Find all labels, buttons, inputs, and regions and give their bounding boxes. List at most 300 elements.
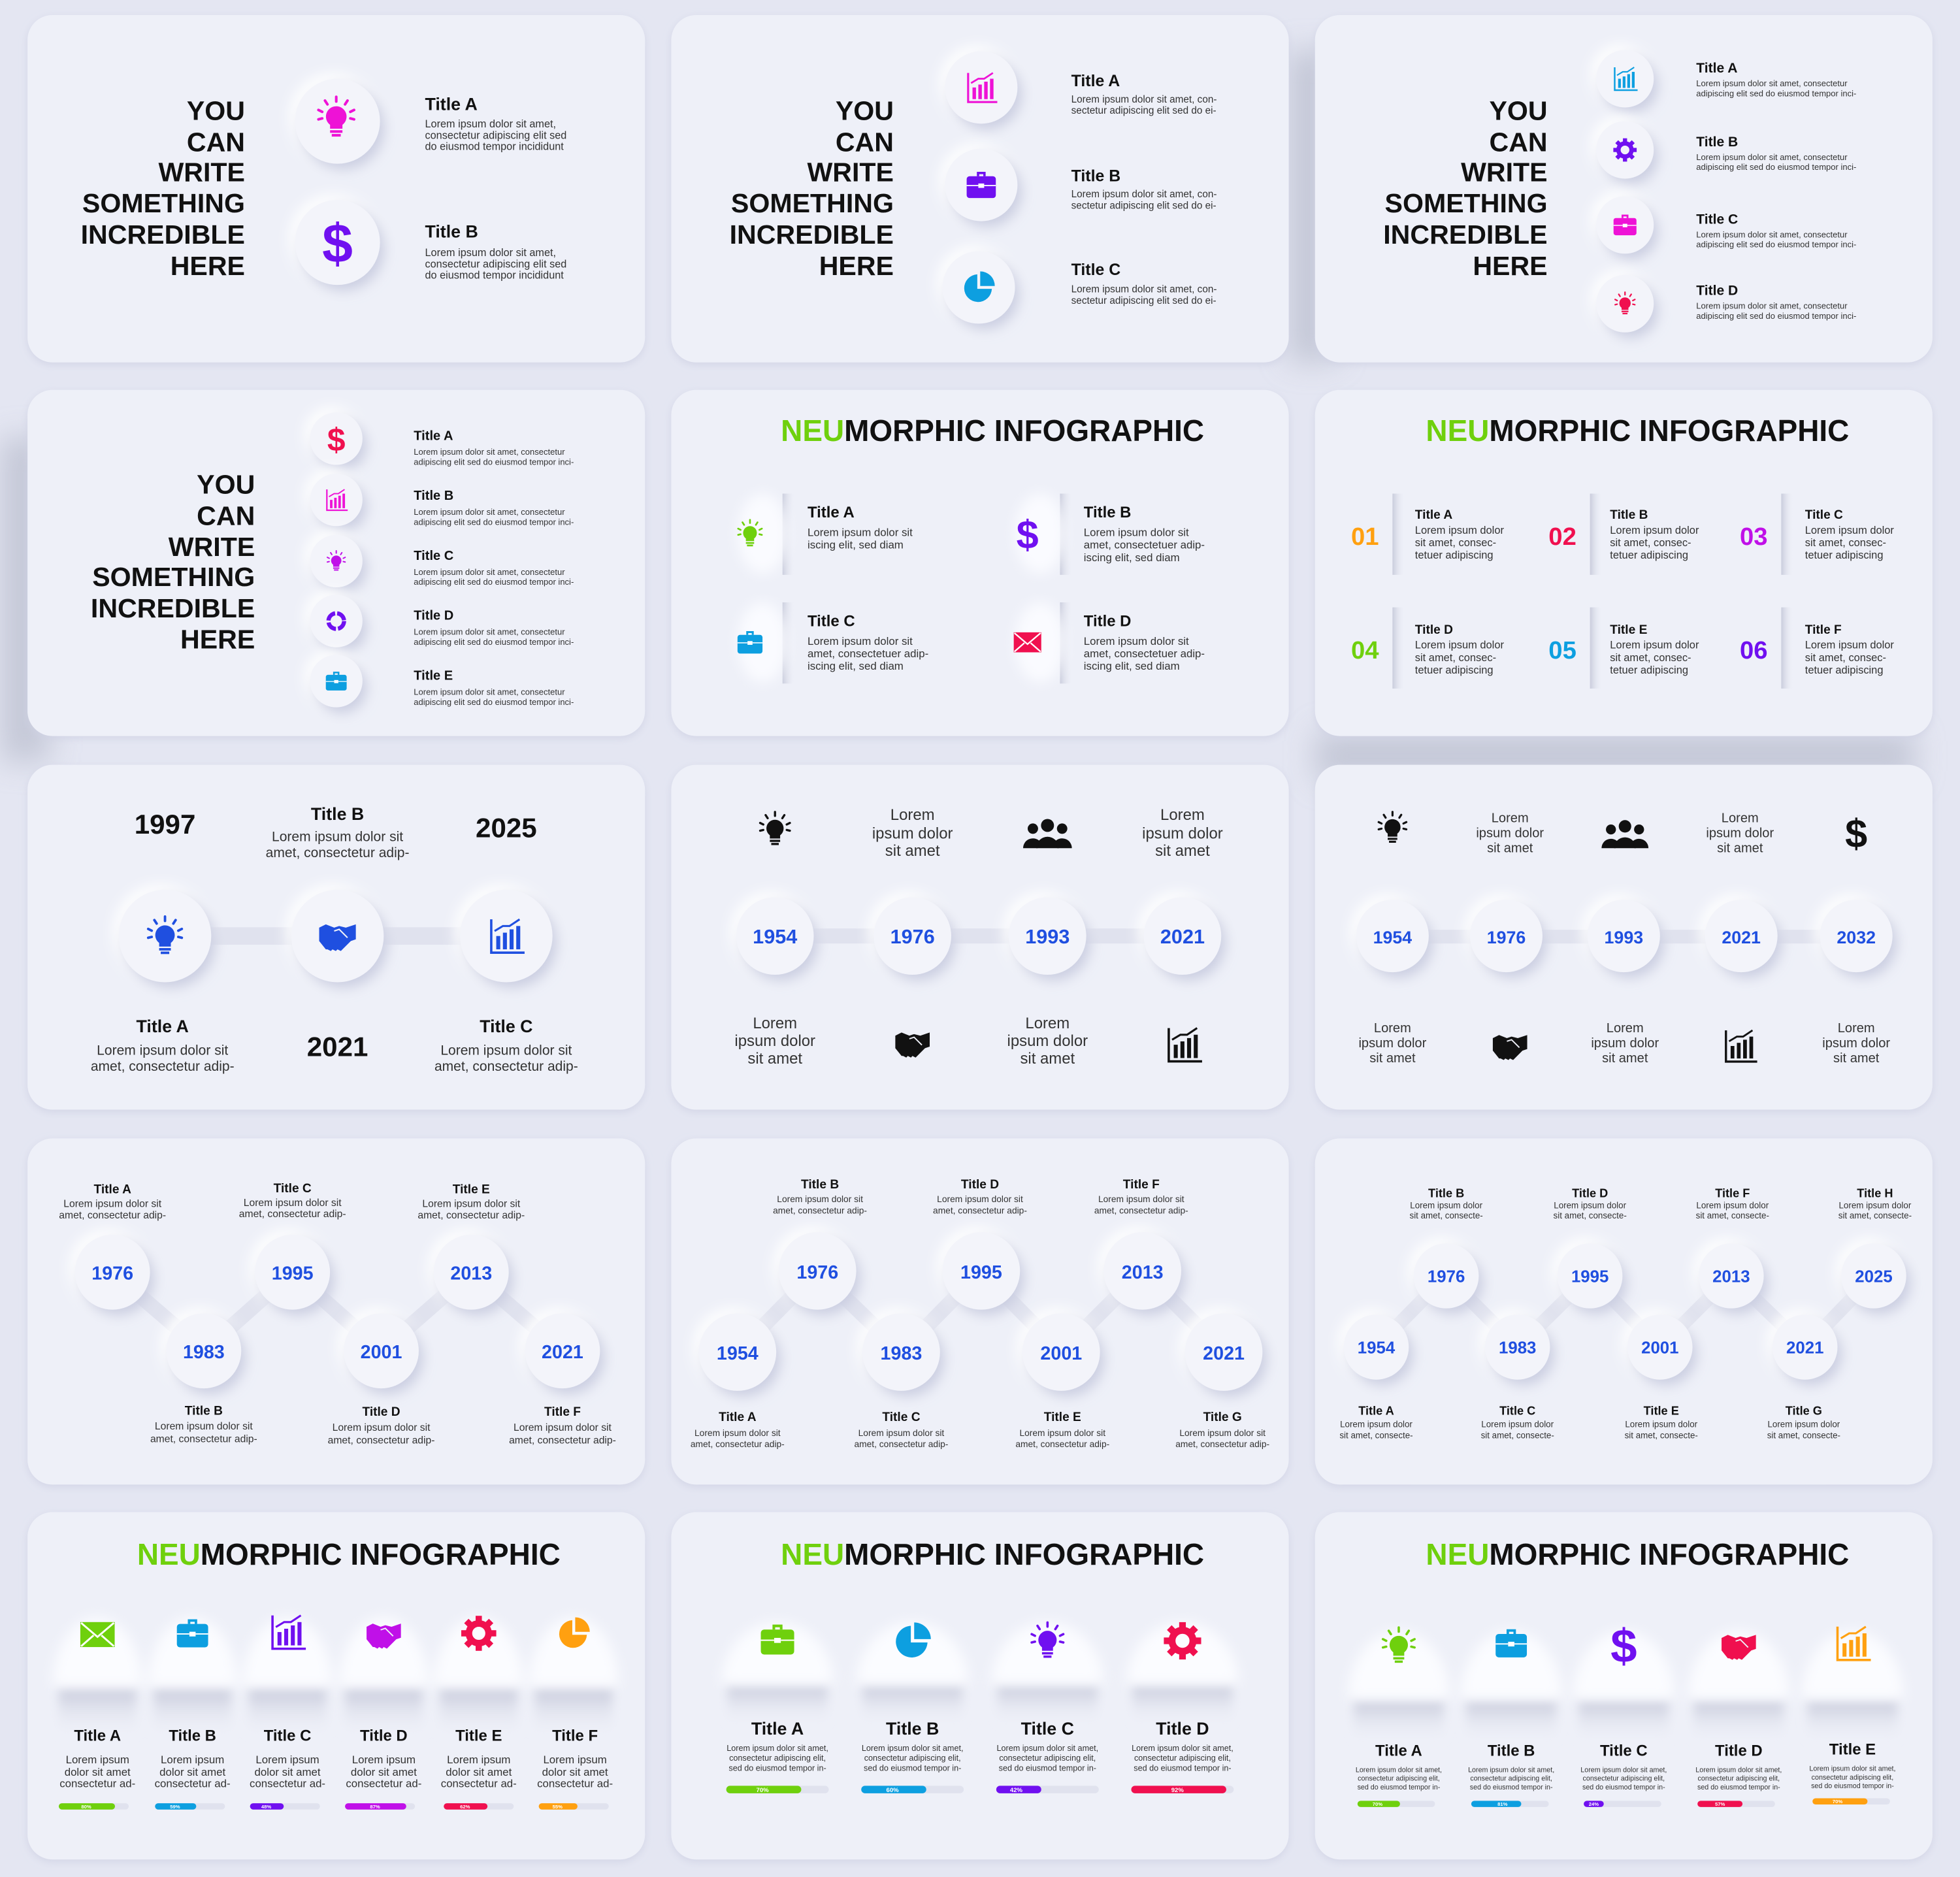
labels: amet, consectetur adip- [328,1435,434,1446]
text: items: Title A [1071,72,1120,90]
progress bars [1358,1798,1890,1807]
text: items: Title A [414,429,453,443]
text: items: adipiscing elit sed do eiusmod tempor inci- [1696,311,1856,321]
labels: Lorem ipsum dolor sit amet, [727,1744,828,1753]
text: title A: Title A [425,94,478,114]
panel: timeline 4 [671,765,1289,1110]
labels: amet, consectetur adip- [266,845,409,860]
icon: bulb [295,79,380,164]
nodes: 1995 [272,1264,314,1284]
nodes: 1983 [1499,1339,1536,1358]
labels: sed do eiusmod tempor in- [999,1763,1096,1772]
icon: briefcase [945,149,1017,221]
heading: SOMETHING [1385,188,1548,218]
text: items: Lorem ipsum dolor sit amet, con- [1071,284,1217,295]
labels: Title D [1572,1186,1608,1200]
nodes: 1995 [960,1262,1002,1283]
panel: two items [27,15,645,363]
nodes: 2021 [1786,1339,1823,1358]
title: NEUMORPHIC INFOGRAPHIC [1426,414,1849,448]
labels: Title B [886,1719,939,1738]
labels: sed do eiusmod tempor in- [1134,1763,1232,1772]
labels: Title A [1375,1742,1422,1759]
title: NEUMORPHIC INFOGRAPHIC [781,1537,1204,1571]
item B: amet, consectetuer adip- [1084,539,1205,551]
labels: consectetur adipiscing elit, [1698,1775,1780,1783]
nodes [75,1235,600,1388]
panel: zigzag 7 [671,1139,1289,1484]
progress bars: 42% [1010,1787,1023,1794]
labels: Lorem ipsum dolor sit [244,1198,342,1209]
labels: Title E [455,1727,502,1745]
heading: INCREDIBLE [91,593,255,623]
labels: Lorem ipsum dolor sit [97,1043,228,1058]
labels: sit amet [1155,842,1210,860]
text: items: tetuer adipiscing [1415,549,1494,561]
text: items: Lorem ipsum dolor sit amet, consectetur [414,567,565,577]
text: items: Title D [414,609,453,623]
text: items: Lorem ipsum dolor sit amet, consectetur [1696,301,1848,310]
text: title A: do eiusmod tempor incididunt [425,141,564,153]
progress bars: 81% [1497,1801,1508,1807]
nodes: 1976 [91,1264,133,1284]
text: items: Title B [1610,508,1648,522]
labels: Lorem ipsum dolor [1767,1419,1840,1429]
text: title B: Lorem ipsum dolor sit amet, [425,247,556,259]
labels: amet, consectetur adip- [691,1439,785,1449]
heading: YOU [187,96,245,126]
text: title B: do eiusmod tempor incididunt [425,270,564,282]
years: 2021 [307,1031,368,1062]
labels: sit amet, consecte- [1767,1431,1840,1441]
panel: six numbered [1315,390,1933,736]
labels: Lorem ipsum dolor [1625,1419,1698,1429]
labels: sit amet, consecte- [1554,1211,1627,1220]
nodes: 2025 [1855,1268,1893,1286]
labels: Title C [1499,1404,1535,1417]
labels: Title A [137,1017,189,1036]
nodes: 1954 [1373,928,1412,947]
text: items: sit amet, consec- [1610,537,1691,549]
title: NEUMORPHIC INFOGRAPHIC [781,414,1204,448]
text: items: tetuer adipiscing [1805,549,1883,561]
text: items: Title B [414,489,453,503]
panel: four progress [671,1512,1289,1859]
labels: ipsum dolor [1007,1032,1088,1050]
labels: amet, consectetur adip- [1015,1439,1109,1449]
labels: Title A [74,1727,121,1745]
nodes [699,1232,1262,1391]
labels: consectetur ad- [346,1777,421,1789]
labels: sed do eiusmod tempor in- [1358,1784,1441,1791]
nodes: 1976 [1487,928,1526,947]
labels: Lorem [1025,1015,1070,1032]
labels: Title F [1123,1178,1160,1192]
progress bars: 80% [81,1804,91,1810]
labels: sed do eiusmod tempor in- [1697,1784,1780,1791]
labels: Title C [1021,1719,1074,1738]
icon: dollar: $ [322,213,353,274]
labels: sed do eiusmod tempor in- [864,1763,961,1772]
labels: ipsum dolor [872,824,953,842]
labels: Lorem ipsum dolor sit [1179,1428,1266,1438]
progress bars: 55% [553,1804,563,1810]
labels: Lorem ipsum dolor sit [1098,1194,1184,1204]
labels: Lorem ipsum dolor sit [514,1422,612,1433]
progress bars: 48% [261,1804,271,1810]
nodes: 2021 [1160,926,1205,948]
labels: Lorem ipsum dolor sit amet, [1468,1766,1554,1774]
labels: dolor sit amet [542,1766,608,1778]
labels: Lorem ipsum dolor sit [937,1194,1023,1204]
text: items: Lorem ipsum dolor sit amet, consectetur [414,507,565,517]
text: title B: consectetur adipiscing elit sed [425,258,566,270]
text: items: Title C [1805,508,1843,522]
labels: Title F [1715,1186,1750,1200]
nodes: 2013 [450,1264,492,1284]
nodes: 1976 [890,926,935,948]
heading: CAN [187,127,245,157]
labels: Lorem ipsum dolor [1340,1419,1413,1429]
text: title A [425,94,566,153]
item A: Title A [808,504,855,521]
labels: consectetur adipiscing elit, [1470,1775,1552,1783]
labels: Title B [185,1404,223,1418]
labels: Lorem [1838,1021,1875,1036]
heading [1383,96,1548,281]
panel: five progress [1315,1512,1933,1859]
heading: INCREDIBLE [730,220,894,250]
nodes: 1954 [717,1343,759,1364]
labels: Title H [1857,1186,1893,1200]
text: items: adipiscing elit sed do eiusmod tempor inci- [1696,88,1856,98]
title: NEUMORPHIC INFOGRAPHIC [1426,1537,1849,1571]
labels: Title A [1358,1404,1394,1417]
domes [721,1622,1239,1725]
labels: Title E [1829,1741,1876,1759]
labels: Title C [264,1727,311,1745]
labels: Lorem [753,1015,797,1032]
labels: Lorem ipsum dolor sit amet, [1695,1766,1782,1774]
text: items: sit amet, consec- [1415,537,1496,549]
labels: Lorem ipsum dolor sit amet, [1809,1765,1896,1772]
text: items: Lorem ipsum dolor [1415,640,1504,651]
labels: consectetur adipiscing elit, [1358,1775,1440,1783]
heading [91,470,255,655]
panel: zigzag 8 [1315,1139,1933,1484]
text: items: Lorem ipsum dolor [1805,525,1894,536]
heading: YOU [1489,96,1548,126]
labels: Title D [360,1727,408,1745]
panel: four items [1315,15,1933,363]
labels: Lorem ipsum dolor sit [155,1421,253,1432]
text: items: Title C [414,549,453,563]
heading: SOMETHING [92,562,255,592]
icon: pie [943,251,1015,323]
heading: SOMETHING [82,188,245,218]
years: 2025 [476,813,537,843]
labels: Lorem [1374,1021,1411,1036]
nodes: 1993 [1025,926,1070,948]
heading: HERE [819,251,894,281]
text: items: Lorem ipsum dolor [1415,525,1504,536]
text: items: tetuer adipiscing [1610,549,1688,561]
heading: CAN [836,127,894,157]
item D: Title D [1084,612,1131,630]
text: items: sectetur adipiscing elit sed do ei- [1071,200,1217,211]
text: items: Title D [1696,283,1738,298]
icons [1596,50,1654,333]
text: items: sit amet, consec- [1415,652,1496,664]
labels: Lorem ipsum dolor sit [777,1194,863,1204]
icon: dollar [295,200,380,285]
labels: Title A [719,1411,757,1424]
labels: Title F [544,1405,581,1419]
labels: dolor sit amet [65,1766,131,1778]
labels: sed do eiusmod tempor in- [1811,1782,1894,1790]
labels: Lorem [1607,1021,1644,1036]
labels: amet, consectetur adip- [1094,1205,1188,1215]
labels: sit amet [1717,841,1763,856]
labels: Lorem ipsum dolor sit amet, [1356,1766,1442,1774]
text: items: Title D [1415,623,1453,637]
labels [59,1727,613,1789]
nodes: 2001 [1641,1339,1679,1358]
text: items: Lorem ipsum dolor [1610,525,1699,536]
item C: iscing elit, sed diam [808,660,904,672]
heading: HERE [171,251,245,281]
numbers [1351,494,1794,689]
labels: Lorem ipsum dolor sit [694,1428,781,1438]
item B: iscing elit, sed diam [1084,551,1180,564]
labels: Title E [1044,1411,1081,1424]
numbers: 03 [1740,523,1768,551]
labels: sed do eiusmod tempor in- [1470,1784,1553,1791]
labels: Title B [169,1727,216,1745]
years [135,809,537,1062]
labels: ipsum dolor [734,1032,815,1050]
labels: dolor sit amet [255,1766,321,1778]
text: items: sectetur adipiscing elit sed do ei- [1071,295,1217,306]
labels: consectetur adipiscing elit, [864,1754,961,1763]
labels: Title D [1715,1742,1763,1759]
text: items: tetuer adipiscing [1610,664,1688,676]
heading: CAN [197,500,255,530]
labels: Lorem ipsum [161,1754,224,1766]
labels: consectetur adipiscing elit, [999,1754,1096,1763]
text: title A: Lorem ipsum dolor sit amet, [425,118,556,130]
item C: Lorem ipsum dolor sit [808,635,913,647]
text: items: tetuer adipiscing [1805,664,1883,676]
heading: HERE [180,625,255,655]
text: items: Lorem ipsum dolor sit amet, consectetur [414,447,565,457]
heading: YOU [836,96,894,126]
item D [1014,602,1205,683]
icons [80,1616,590,1651]
text: items: adipiscing elit sed do eiusmod tempor inci- [414,457,574,467]
labels: Lorem ipsum dolor [1481,1419,1554,1429]
text: items: sit amet, consec- [1610,652,1691,664]
text: items: Lorem ipsum dolor [1610,640,1699,651]
labels: ipsum dolor [1706,826,1774,841]
labels: Lorem [1160,806,1205,824]
item C: Title C [808,612,855,630]
progress bars: 62% [460,1804,470,1810]
text: items: Lorem ipsum dolor sit amet, con- [1071,94,1217,105]
panel: six progress [27,1512,645,1859]
labels: ipsum dolor [1358,1036,1427,1051]
item B: $ [1017,513,1039,557]
labels: sit amet, consecte- [1696,1211,1769,1220]
labels: Lorem ipsum dolor sit [422,1199,521,1210]
labels: Lorem ipsum dolor [1696,1201,1769,1211]
nodes: 1983 [881,1343,922,1364]
nodes [1344,1243,1906,1380]
labels: Title A [93,1183,131,1197]
labels: sit amet [1833,1051,1880,1066]
text: items: sit amet, consec- [1805,537,1886,549]
title: NEUMORPHIC INFOGRAPHIC [137,1537,561,1571]
text: items: Lorem ipsum dolor sit amet, consectetur [1696,229,1848,239]
labels: dolor sit amet [446,1766,512,1778]
heading: WRITE [158,157,245,187]
labels: amet, consectetur adip- [933,1205,1027,1215]
heading [730,96,894,281]
labels: Title F [552,1727,598,1745]
labels [727,1719,1233,1772]
text: items: Title A [1696,61,1737,76]
labels: Title C [882,1411,921,1424]
numbers: 04 [1351,636,1379,664]
labels: Lorem ipsum [447,1754,510,1766]
panel: four quadrants [671,390,1289,736]
nodes: 1976 [796,1262,838,1283]
labels [1356,1741,1896,1791]
icons [1383,1620,1871,1673]
labels: sit amet, consecte- [1481,1431,1554,1441]
labels: amet, consectetur adip- [1175,1439,1269,1449]
heading: WRITE [169,532,255,562]
nodes: 2021 [1722,928,1761,947]
labels: sit amet [747,1050,802,1068]
text: items: Lorem ipsum dolor [1805,640,1894,651]
labels: sit amet, consecte- [1838,1211,1912,1220]
labels: Lorem ipsum dolor sit [1019,1428,1105,1438]
labels: ipsum dolor [1142,824,1223,842]
progress bars: 70% [1373,1801,1382,1807]
panel: zigzag 6 [27,1139,645,1484]
item A [738,494,913,575]
labels: Lorem ipsum dolor sit [858,1428,944,1438]
labels: Title C [274,1182,312,1196]
labels: amet, consectetur adip- [417,1210,525,1221]
panel: three items [671,15,1289,363]
labels: Lorem ipsum [66,1754,129,1766]
labels: Title G [1203,1411,1242,1424]
labels: Title C [480,1017,533,1036]
labels: dolor sit amet [351,1766,417,1778]
labels: Title E [1644,1404,1679,1417]
domes [52,1617,619,1737]
labels: sit amet [885,842,940,860]
labels [1358,811,1890,1066]
item D: amet, consectetuer adip- [1084,647,1205,660]
decorative shadows [0,50,1915,781]
text: items: Title E [414,669,453,683]
labels: sed do eiusmod tempor in- [1582,1784,1665,1791]
text: items: Title C [1696,212,1738,227]
labels: Lorem ipsum dolor sit [63,1199,162,1210]
text: items: Title B [1071,167,1120,185]
item B [1015,494,1205,575]
heading: INCREDIBLE [81,220,245,250]
labels: Lorem ipsum dolor sit amet, [997,1744,1098,1753]
labels: amet, consectetur adip- [855,1439,948,1449]
years: 1997 [135,809,195,840]
labels: Lorem ipsum dolor [1839,1201,1912,1211]
progress bars: 70% [757,1787,769,1794]
panel: five items [27,390,645,736]
icons [1379,811,1867,1062]
panel: timeline 3 [27,765,645,1110]
labels: sit amet [1602,1051,1648,1066]
labels: Lorem [1722,811,1759,826]
heading: YOU [197,470,255,500]
nodes: 1983 [183,1342,225,1363]
heading: INCREDIBLE [1383,220,1548,250]
icon: chart [945,51,1017,123]
text: items: adipiscing elit sed do eiusmod tempor inci- [414,577,574,587]
text: items: adipiscing elit sed do eiusmod tempor inci- [1696,162,1856,172]
labels: Lorem ipsum dolor sit amet, [1580,1766,1667,1774]
heading: SOMETHING [731,188,894,218]
connector [165,927,506,945]
heading: HERE [1473,251,1548,281]
labels: Title B [311,804,364,824]
labels: consectetur ad- [250,1777,325,1789]
labels: consectetur ad- [155,1777,231,1789]
text: items: Title C [1071,261,1120,279]
progress bars [59,1803,609,1810]
progress bars: 70% [1833,1799,1842,1804]
heading: WRITE [807,157,894,187]
labels: Lorem ipsum dolor sit [333,1422,431,1433]
labels: Lorem ipsum dolor sit [272,829,403,844]
labels: Lorem ipsum dolor sit amet, [862,1744,963,1753]
nodes: 2013 [1712,1268,1750,1286]
icons [760,812,1202,1062]
labels: amet, consectetur adip- [509,1435,616,1446]
item A: iscing elit, sed diam [808,539,904,551]
item D: iscing elit, sed diam [1084,660,1180,672]
labels [59,1182,616,1446]
icons: $ [1845,811,1867,856]
icons: $ [327,422,345,459]
item A: Lorem ipsum dolor sit [808,527,913,539]
labels: consectetur adipiscing elit, [1812,1774,1893,1782]
text: items: tetuer adipiscing [1415,664,1494,676]
text: items [1696,61,1856,321]
labels [91,804,578,1074]
icons [761,1622,1201,1659]
item B: Title B [1084,504,1131,521]
item C [738,602,928,683]
text: items: sectetur adipiscing elit sed do ei- [1071,105,1217,116]
text: items [414,429,574,707]
text: items: Lorem ipsum dolor sit amet, con- [1071,189,1217,200]
labels: Title D [961,1178,999,1192]
labels: amet, consectetur adip- [239,1209,346,1220]
